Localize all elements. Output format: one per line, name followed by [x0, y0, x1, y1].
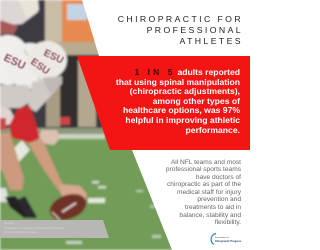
statistic text: performance.	[186, 125, 240, 135]
body text: professional sports teams	[166, 166, 241, 173]
body text: All NFL teams and most	[171, 158, 241, 166]
body text: chiropractic as part of the	[167, 181, 241, 188]
white lower panel	[132, 150, 250, 250]
body text: flexibility.	[215, 219, 241, 226]
body text: have doctors of	[196, 174, 241, 181]
statistic text: healthcare options, was 97%	[123, 105, 240, 115]
body text: treatments to aid in	[185, 204, 241, 211]
helmet logos: ESU	[42, 48, 65, 66]
caption text: Photos: iStock Getty Images	[4, 231, 37, 234]
red statistic panel	[77, 56, 250, 150]
title	[118, 14, 243, 46]
white title panel	[82, 0, 250, 56]
caption text: Sources:	[4, 222, 14, 225]
logo: Foundation for	[215, 236, 229, 239]
body text	[166, 158, 241, 226]
statistic text: that using spinal manipulation	[116, 77, 240, 87]
title: PROFESSIONAL	[147, 24, 243, 34]
caption text: Foundation for Chiropractic Progress and Footnotes	[4, 226, 64, 230]
logo: Chiropractic Progress	[215, 240, 242, 243]
title: ATHLETES	[180, 36, 243, 46]
statistic text: among other types of	[153, 96, 240, 106]
background photo: football players on field	[0, 0, 250, 250]
body text: medical staff for injury	[177, 189, 241, 196]
statistic text: 1 IN 5adults reported	[134, 67, 240, 77]
logo	[210, 232, 242, 245]
statistic text: (chiropractic adjustments),	[130, 86, 240, 96]
statistic text: helpful in improving athletic	[125, 115, 240, 125]
helmet logos: ESU	[2, 52, 27, 72]
title: CHIROPRACTIC FOR	[118, 14, 243, 24]
body text: balance, stability and	[179, 212, 241, 219]
statistic text	[116, 67, 240, 135]
caption text	[4, 222, 64, 234]
helmet logos	[2, 48, 65, 77]
caption bar	[0, 220, 109, 238]
helmet logos: ESU	[28, 56, 51, 77]
body text: prevention and	[197, 196, 241, 203]
